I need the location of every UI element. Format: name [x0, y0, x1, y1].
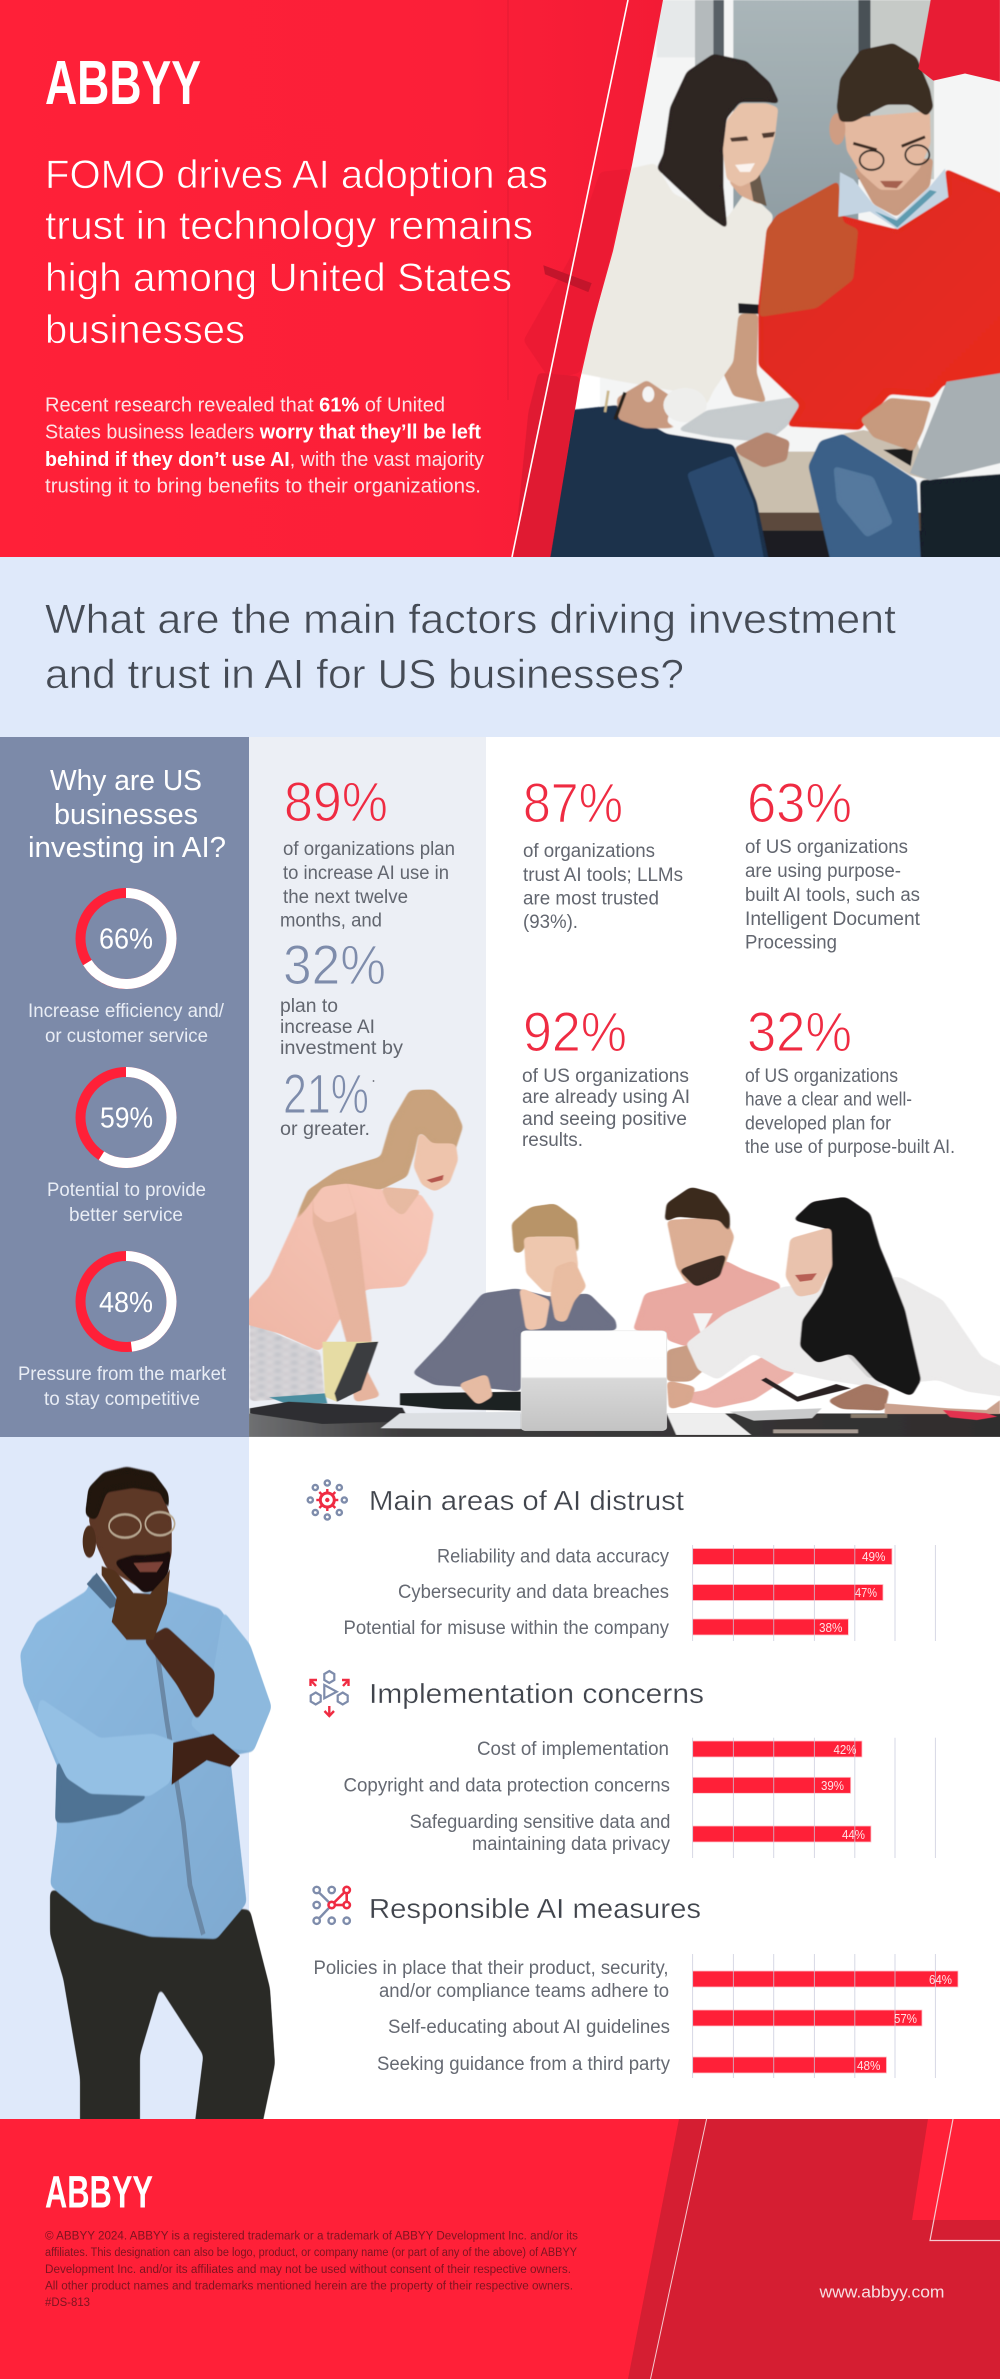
stat: 89% and 32% and 21%: months, and [280, 910, 382, 932]
label: efficiency: Increase efficiency and/ [28, 1001, 225, 1022]
panel: question band [0, 557, 1000, 737]
label: market pressure [18, 1364, 227, 1410]
bar chart: responsible AI: 64% [929, 1972, 952, 1987]
stat: 63%: Intelligent Document [745, 909, 921, 930]
label: better service: Potential to provide [47, 1180, 206, 1201]
label: market pressure: to stay competitive [44, 1389, 200, 1410]
panel heading [28, 765, 226, 864]
legal text: #DS-813 [45, 2297, 90, 2309]
donut: 66%: 66% [99, 924, 153, 956]
bar chart: responsible AI: 48% [857, 2058, 881, 2073]
heading: implementation concerns: Implementation concerns [369, 1678, 704, 1709]
label: market pressure: Pressure from the market [18, 1364, 227, 1385]
photo: team around a laptop [230, 1089, 1000, 1437]
bar chart: implementation: 42% [834, 1742, 857, 1757]
stat: 87%: of organizations [523, 841, 655, 862]
hero title: businesses [45, 308, 245, 352]
bar chart: responsible AI: Seeking guidance from a third party [377, 2054, 670, 2075]
bar chart: implementation: maintaining data privacy [472, 1834, 670, 1855]
donut: 48%: 48% [99, 1287, 153, 1319]
stat: 89% and 32% and 21%: investment by [280, 1038, 404, 1059]
section question heading: What are the main factors driving investment [45, 596, 897, 642]
stat: 32% clear plan: developed plan for [745, 1114, 892, 1134]
website: www.abbyy.com [818, 2282, 944, 2302]
legal text: affiliates. This designation can also be logo, product, or company name (or part of any of the above) of ABBYY [45, 2247, 577, 2259]
stat: 92%: are already using AI [522, 1087, 690, 1108]
stat: 92% [522, 1000, 690, 1151]
bar chart: implementation: Cost of implementation [477, 1739, 669, 1760]
panel: hero [0, 0, 1000, 573]
stat: 89% and 32% and 21%: to increase AI use in [283, 863, 449, 884]
donut: 59% [80, 1072, 172, 1163]
laptop lid [521, 1331, 667, 1431]
red diagonal panel [0, 0, 663, 560]
panel: why investing [0, 737, 249, 1437]
stat: 32% clear plan: have a clear and well- [745, 1090, 912, 1110]
heading: main areas of AI distrust: Main areas of AI distrust [369, 1485, 684, 1516]
stat: 89% and 32% and 21%: the next twelve [283, 887, 408, 908]
icon: gear network [308, 1480, 347, 1520]
stat: 32% clear plan [745, 1000, 955, 1158]
panel heading: investing in AI? [28, 832, 226, 864]
bar chart: responsible AI: Self-educating about AI guidelines [388, 2017, 670, 2038]
section question heading: and trust in AI for US businesses? [45, 651, 684, 697]
stat: 63%: built AI tools, such as [745, 885, 920, 906]
panel: light stats background [249, 737, 486, 1437]
legal text [45, 2230, 578, 2309]
bar chart: implementation [344, 1738, 935, 1858]
bar chart: responsible AI: 57% [894, 2011, 917, 2026]
legal text: Development Inc. and/or its affiliates and may not be used without consent of their respective owners. [45, 2264, 571, 2276]
red corner top right [918, 0, 1000, 82]
bar chart: responsible AI: and/or compliance teams adhere to [379, 1981, 669, 2002]
icon: node network [314, 1887, 350, 1924]
stat: 87%: are most trusted [523, 888, 659, 910]
stat: 87%: trust AI tools; LLMs [523, 865, 683, 886]
section: implementation concerns [310, 1671, 935, 1858]
stat: 89% and 32% and 21%: 32% [283, 933, 386, 996]
stat: 92%: and seeing positive [522, 1109, 687, 1130]
stat: 32% clear plan: the use of purpose-built AI. [745, 1137, 955, 1158]
hero paragraph: behind if they don’t use AI, with the vast majority [45, 449, 484, 471]
label: better service [47, 1180, 206, 1226]
stat: 92%: results. [522, 1130, 583, 1151]
diagonal white line [512, 0, 628, 557]
bar chart: distrust: 38% [819, 1620, 843, 1635]
label: efficiency [28, 1001, 225, 1047]
heading: responsible AI measures: Responsible AI measures [369, 1893, 701, 1924]
stat: 63%: are using purpose- [745, 861, 901, 882]
donut: 48% [80, 1256, 172, 1347]
bar chart: implementation: Safeguarding sensitive data and [410, 1812, 670, 1833]
section question heading [45, 596, 897, 697]
stat: 63% [745, 771, 921, 954]
stat: 63%: 63% [747, 771, 852, 834]
label: efficiency: or customer service [45, 1026, 208, 1047]
stat: 87% [523, 771, 683, 933]
bar chart: distrust [344, 1545, 935, 1641]
panel: footer [0, 2119, 1000, 2379]
stat: 92%: of US organizations [522, 1066, 689, 1087]
stat: 89% and 32% and 21%: of organizations plan [283, 839, 455, 860]
bar chart: distrust: Reliability and data accuracy [437, 1546, 669, 1568]
bar chart: responsible AI [314, 1954, 958, 2078]
bar chart: implementation: 39% [821, 1778, 844, 1793]
hero title [45, 153, 548, 352]
hero title: FOMO drives AI adoption as [45, 153, 548, 197]
bar chart: distrust: 49% [862, 1549, 886, 1564]
section: responsible AI measures [314, 1887, 958, 2078]
footer logo: ABBYY [45, 2166, 153, 2218]
bar chart: distrust: Cybersecurity and data breaches [398, 1582, 669, 1603]
section: main areas of AI distrust [308, 1480, 935, 1641]
stat: 87%: (93%). [523, 912, 578, 933]
logo: ABBYY: ABBYY [45, 49, 201, 118]
panel heading: businesses [54, 799, 198, 831]
photo: thinking man [20, 1467, 275, 2135]
stat: 89% and 32% and 21%: 21% [283, 1062, 369, 1125]
hero paragraph [45, 394, 484, 498]
stat: 87%: 87% [523, 771, 623, 834]
bar chart: distrust: Potential for misuse within the company [344, 1618, 669, 1639]
donut: 66% [80, 893, 172, 984]
bar chart: implementation: 44% [842, 1827, 865, 1842]
hero paragraph: trusting it to bring benefits to their organizations. [45, 476, 481, 498]
photo: two colleagues with laptop [533, 0, 1000, 573]
panel: thinking man background [0, 1437, 249, 2119]
bar chart: distrust: 47% [855, 1585, 877, 1600]
hero title: trust in technology remains [45, 204, 533, 248]
stat: 32% clear plan: of US organizations [745, 1066, 898, 1087]
stat: 32% clear plan: 32% [747, 1000, 852, 1063]
hero paragraph: States business leaders worry that they’ll be left [45, 422, 481, 444]
hero title: high among United States [45, 256, 512, 300]
stat: 89% and 32% and 21%: plan to [280, 996, 338, 1017]
stat: 89% and 32% and 21% [280, 770, 455, 1140]
stat: 63%: of US organizations [745, 837, 908, 858]
legal text: © ABBYY 2024. ABBYY is a registered trademark or a trademark of ABBYY Development Inc. and/or its [45, 2230, 578, 2242]
donut: 59%: 59% [100, 1102, 153, 1134]
stat: 89% and 32% and 21%: increase AI [280, 1017, 375, 1038]
legal text: All other product names and trademarks mentioned herein are the property of their respective owners. [45, 2280, 573, 2292]
icon: play with hexagons and arrows [310, 1671, 348, 1716]
bar chart: responsible AI: Policies in place that their product, security, [314, 1958, 668, 1979]
bar chart: implementation: Copyright and data protection concerns [344, 1776, 670, 1796]
stat: 63%: Processing [745, 932, 837, 954]
stat: 89% and 32% and 21%: or greater. [280, 1119, 370, 1140]
panel heading: Why are US [50, 765, 202, 797]
stat: 89% and 32% and 21%: 89% [284, 770, 388, 833]
hero paragraph: Recent research revealed that 61% of United [45, 394, 445, 416]
label: better service: better service [69, 1205, 183, 1226]
stat: 92%: 92% [523, 1000, 627, 1063]
